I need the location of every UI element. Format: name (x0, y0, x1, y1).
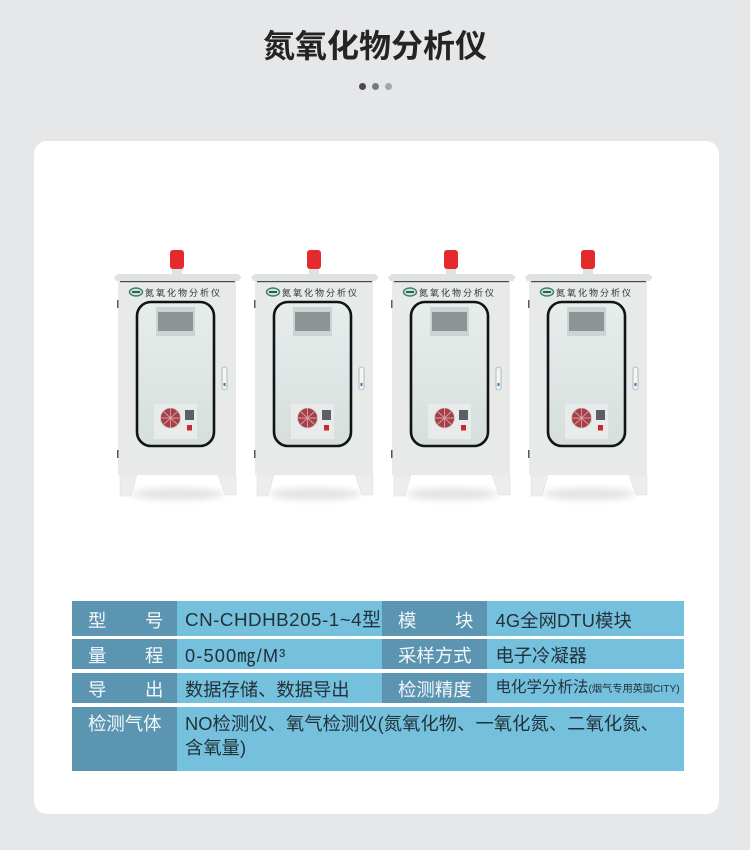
value: detected gases (185, 713, 659, 758)
row 3 value background (72, 673, 684, 703)
value: module: 4G全网DTU模块 (496, 610, 632, 631)
cabinet 2 (251, 250, 378, 500)
cabinet 4: 氮氧化物分析仪 (556, 287, 633, 298)
value: model: CN-CHDHB205-1~4型 (185, 609, 381, 630)
label: module: 块 (455, 610, 473, 631)
cabinet 2: 氮氧化物分析仪 (282, 287, 359, 298)
label: range: 程 (145, 645, 163, 666)
row 4 value background (72, 707, 684, 771)
label: module (382, 601, 487, 636)
value: detection accuracy: 电化学分析法(烟气专用英国CITY) (496, 678, 680, 696)
label: module: 模 (398, 610, 416, 631)
product image: four analyzer cabinets (114, 250, 652, 502)
panel: white product card (34, 141, 719, 814)
value: sampling method: 电子冷凝器 (496, 645, 587, 666)
label: detection accuracy (382, 673, 487, 703)
value: detected gases: NO检测仪、氧气检测仪(氮氧化物、一氧化氮、二氧化氮、 (185, 713, 659, 734)
label: range: 量 (88, 645, 106, 666)
label: export (72, 673, 177, 703)
row 2 value background (72, 639, 684, 669)
label: detection accuracy: 检测精度 (398, 679, 472, 700)
label: model: 型 (88, 610, 106, 631)
label: detected gases: 检测气体 (88, 713, 162, 734)
value: range: 0-500㎎/M³ (185, 645, 286, 666)
label: range (72, 639, 177, 669)
pagination dots (359, 83, 392, 90)
row 1 value background (72, 601, 684, 636)
cabinet 1: 氮氧化物分析仪 (145, 287, 222, 298)
label: detected gases (72, 707, 177, 771)
label: model (72, 601, 177, 636)
cabinet 3 (388, 250, 516, 500)
label: export: 出 (145, 679, 163, 700)
cabinet 1 (114, 250, 242, 500)
label: model: 号 (145, 610, 163, 631)
label: sampling method (382, 639, 487, 669)
cabinet 3: 氮氧化物分析仪 (419, 287, 496, 298)
spec table (72, 601, 684, 771)
label: export: 导 (88, 679, 106, 700)
cabinet 4 (525, 250, 652, 500)
label: sampling method: 采样方式 (398, 645, 472, 666)
value: export: 数据存储、数据导出 (185, 679, 350, 700)
title: 氮氧化物分析仪 (263, 28, 487, 64)
value: detected gases: 含氧量) (185, 737, 246, 758)
